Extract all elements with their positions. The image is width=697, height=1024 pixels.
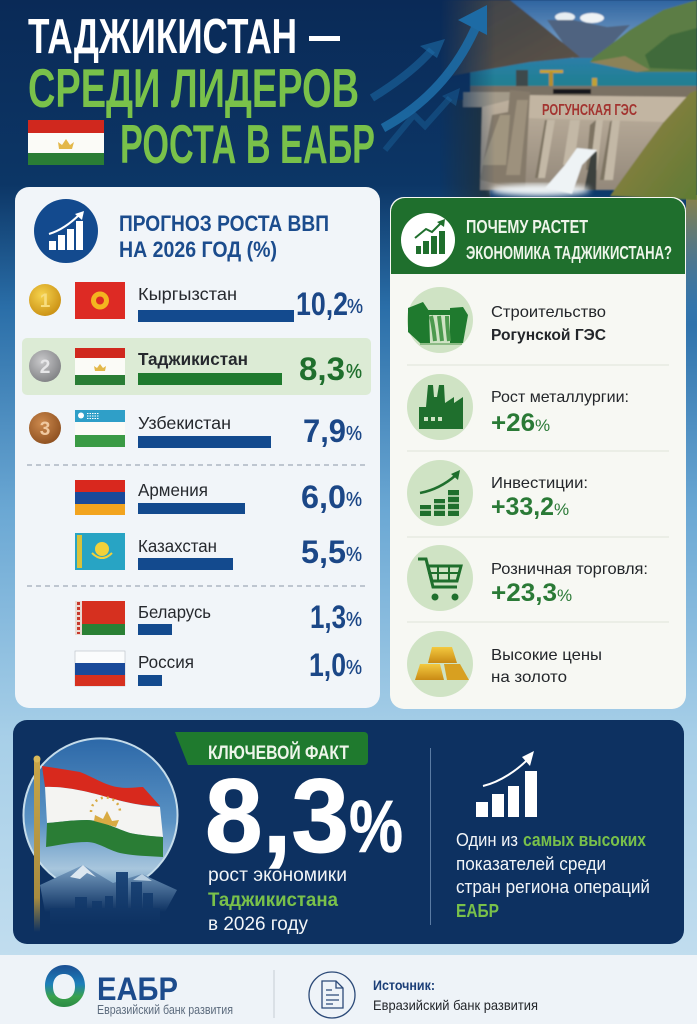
- title: [28, 10, 375, 175]
- row: Uzbekistan: 7,9: [303, 413, 346, 449]
- logo: EABR: [45, 965, 233, 1017]
- row: Tajikistan highlighted: %: [346, 361, 362, 383]
- row: Tajikistan highlighted: 2: [40, 357, 50, 378]
- row: Belarus: [75, 599, 362, 635]
- illustration: flag in circle: [24, 738, 180, 932]
- row: Tajikistan highlighted: 8,3: [299, 351, 345, 387]
- hillside edge on right: [686, 195, 697, 325]
- row: Armenia: Армения: [138, 480, 208, 500]
- dam label: РОГУНСКАЯ ГЭС: [542, 102, 637, 119]
- key fact caption: в 2026 году: [208, 913, 308, 935]
- item: metallurgy: %: [535, 416, 550, 435]
- row: Kazakhstan: %: [346, 544, 362, 566]
- heading: [119, 211, 329, 262]
- item: retail: +23,3: [491, 579, 557, 607]
- row: Russia: [75, 647, 362, 686]
- header text: ПОЧЕМУ РАСТЕТ: [466, 217, 588, 237]
- row: Kyrgyzstan: 1: [40, 291, 51, 312]
- row: Kazakhstan: [75, 533, 362, 570]
- item: retail: %: [557, 586, 572, 605]
- item: retail: [407, 545, 648, 611]
- key fact note: самых высоких: [523, 830, 646, 850]
- row: Kyrgyzstan: %: [347, 296, 363, 318]
- item: investments: %: [554, 500, 569, 519]
- row: Belarus: 1,3: [310, 599, 346, 635]
- row: Russia: Россия: [138, 652, 194, 672]
- key fact note: ЕАБР: [456, 901, 499, 921]
- panel: GDP growth forecast: [15, 187, 380, 708]
- key fact caption: Таджикистана: [208, 889, 338, 911]
- row: Uzbekistan: Узбекистан: [138, 413, 231, 433]
- item: Rogun construction: Рогунской ГЭС: [491, 327, 606, 344]
- logo: EABR: ЕАБР: [97, 971, 178, 1007]
- row: Uzbekistan: 3: [40, 419, 50, 440]
- key fact caption: [208, 864, 347, 935]
- key fact note: показателей среди: [456, 854, 606, 874]
- item: gold prices: на золото: [491, 669, 567, 686]
- big number: %: [349, 785, 403, 868]
- panel: why the economy grows: [390, 197, 686, 709]
- key fact caption: рост экономики: [208, 864, 347, 886]
- item: retail: Розничная торговля:: [491, 561, 648, 578]
- item: investments: Инвестиции:: [491, 475, 588, 492]
- source: Евразийский банк развития: [373, 997, 538, 1013]
- title: РОСТА В ЕАБР: [120, 113, 375, 175]
- title flag: Tajikistan: [28, 120, 104, 165]
- row: Uzbekistan: %: [346, 423, 362, 445]
- row: Belarus: %: [346, 609, 362, 631]
- title: ТАДЖИКИСТАН: [28, 10, 297, 64]
- row: Armenia: %: [346, 489, 362, 511]
- header text: [466, 217, 672, 263]
- row: Armenia: 6,0: [301, 479, 346, 515]
- icon: growth chart: [476, 751, 537, 817]
- source: [373, 977, 538, 1013]
- item: metallurgy: Рост металлургии:: [491, 389, 629, 406]
- hero photo: Rogun dam: [430, 0, 697, 200]
- row: Kazakhstan: 5,5: [301, 534, 346, 570]
- decorative growth arrows: [372, 5, 487, 150]
- badge: key fact: [175, 732, 368, 765]
- item: investments: [407, 460, 588, 526]
- badge: key fact: КЛЮЧЕВОЙ ФАКТ: [208, 742, 349, 764]
- key fact note: [456, 830, 650, 921]
- logo: EABR: Евразийский банк развития: [97, 1003, 233, 1017]
- item: gold prices: Высокие цены: [491, 647, 602, 664]
- panel: key fact: [13, 720, 684, 944]
- item: metallurgy: [407, 374, 629, 440]
- row: Tajikistan highlighted: Таджикистан: [138, 349, 248, 369]
- row: Uzbekistan: [29, 410, 362, 449]
- source: Источник:: [373, 977, 435, 993]
- icon: document: [309, 972, 355, 1018]
- row: Kyrgyzstan: [29, 282, 363, 322]
- heading: ПРОГНОЗ РОСТА ВВП: [119, 211, 329, 236]
- icon: header chart: [401, 213, 455, 267]
- row: Tajikistan highlighted: [22, 338, 371, 395]
- item: gold prices: [407, 631, 602, 697]
- row: Russia: 1,0: [309, 647, 346, 683]
- heading: НА 2026 ГОД (%): [119, 237, 277, 262]
- icon: chart circle: [34, 199, 98, 263]
- key fact note: стран региона операций: [456, 877, 650, 897]
- key fact note: Один из: [456, 830, 518, 850]
- row: Kyrgyzstan: Кыргызстан: [138, 284, 237, 304]
- item: investments: +33,2: [491, 493, 554, 521]
- item: metallurgy: +26: [491, 409, 535, 437]
- item: Rogun construction: [407, 287, 606, 353]
- big number: 8,3: [205, 758, 349, 875]
- row: Armenia: [75, 479, 362, 515]
- row: Russia: %: [346, 657, 362, 679]
- row: Kyrgyzstan: 10,2: [296, 286, 348, 322]
- panel header: [391, 198, 685, 274]
- row: Kazakhstan: Казахстан: [138, 536, 217, 556]
- footer: [0, 955, 697, 1024]
- item: Rogun construction: Строительство: [491, 304, 606, 321]
- row: Belarus: Беларусь: [138, 602, 211, 622]
- title: СРЕДИ ЛИДЕРОВ: [28, 57, 359, 119]
